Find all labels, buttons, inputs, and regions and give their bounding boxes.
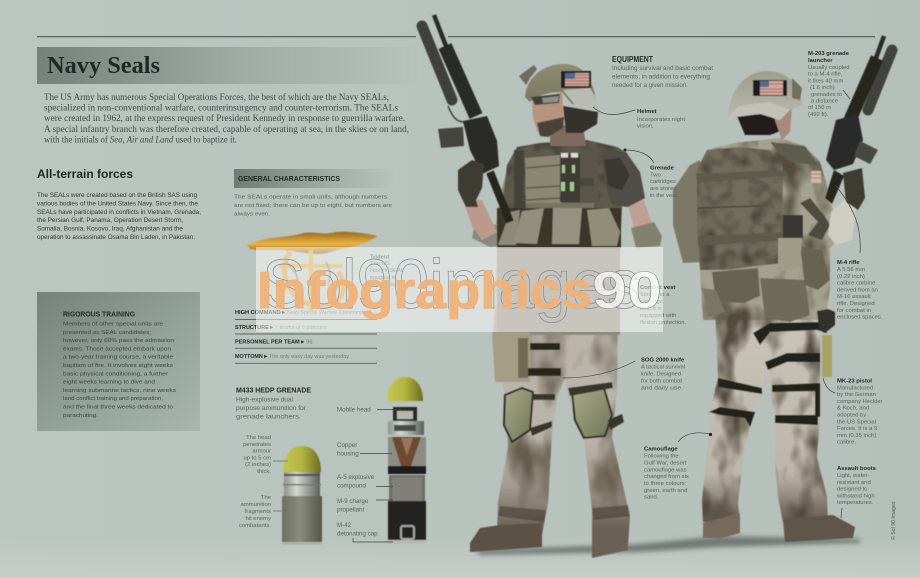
equipment text xyxy=(612,55,713,89)
trident label: Navy's SEAL xyxy=(370,268,405,274)
panel: rigorous training: land conflict training and preparation, xyxy=(63,396,163,402)
equipment text: needed for a given mission. xyxy=(612,82,688,89)
callout: MK-23 pistol: Forces. It is a 9 xyxy=(837,426,877,432)
section: all-terrain forces: operation to assassinate Osama Bin Laden, in Pakistan. xyxy=(37,234,195,241)
callout: M-4 rifle: M-4 rifle xyxy=(837,260,860,266)
grenade cross-section labels xyxy=(337,406,401,542)
grenade exterior labels: The xyxy=(261,495,272,501)
grenade cross-section labels: propellant xyxy=(337,507,364,514)
grenade exterior labels: (2 inches) xyxy=(245,462,271,468)
callout: SOG 2000 knife: A tactical survival xyxy=(641,365,685,371)
panel: rigorous training: eight weeks learning to dive and xyxy=(63,380,155,386)
characteristics table xyxy=(235,310,377,363)
grenade heading: M433 HEDP GRENADE xyxy=(236,388,311,395)
section: all-terrain forces: All-terrain forces xyxy=(37,167,133,181)
callout: M-203 grenade launcher: M-203 grenade xyxy=(808,51,850,57)
callout: M-203 grenade launcher: (1.6 inch) xyxy=(810,85,835,91)
grenade cross-section labels: Mobile head xyxy=(337,406,371,414)
grenade cross-section labels: M-9 charge xyxy=(337,498,369,505)
callout: grenade xyxy=(624,148,679,199)
callout: M-203 grenade launcher: (492 ft). xyxy=(808,112,829,118)
rifle, rear soldier xyxy=(825,36,892,210)
callout: camouflage: Camouflage xyxy=(644,446,678,452)
callout: SOG 2000 knife: for both combat xyxy=(641,378,682,384)
trident label: the trident xyxy=(370,282,397,288)
callout: M-203 grenade launcher: grenades to xyxy=(811,92,843,98)
intro text: A special infantry branch was therefore created, capable of operating at sea, in the skies or on land, xyxy=(44,124,409,135)
callout: M-203 grenade launcher: a distance xyxy=(811,98,839,104)
callout: MK-23 pistol: adopted by xyxy=(837,412,866,418)
callout: combat vest: cartridge xyxy=(640,299,664,305)
row: structure: STRUCTURE ▸ xyxy=(235,325,274,331)
trident label: Trident xyxy=(370,254,389,260)
callout: grenade: are stored xyxy=(650,186,677,192)
callout: assault boots: temperatures. xyxy=(837,500,874,506)
pistol holster xyxy=(817,309,835,377)
grenade exterior labels: up to 5 cm xyxy=(243,455,271,461)
grenade exterior labels: fragments xyxy=(245,509,271,515)
intro text: were created in 1962, at the express request of President Kennedy in response to guerrilla warfare. xyxy=(44,113,405,124)
callout: M-203 grenade launcher: to a M-4 rifle, xyxy=(808,72,843,78)
callout: camouflage: to three colours: xyxy=(644,481,687,487)
panel: rigorous training: however, only 60% pass the admission xyxy=(63,338,174,344)
panel: rigorous training: Members of other special units are xyxy=(63,322,164,328)
grenade heading: High-explosive dual xyxy=(236,397,293,404)
section: all-terrain forces: The SEALs were created based on the British SAS using xyxy=(37,192,197,199)
callout: M-4 rifle xyxy=(835,185,883,321)
callout: MK-23 pistol: by the German xyxy=(837,392,876,398)
grenade exterior labels: hit enemy xyxy=(245,516,271,522)
callout: camouflage: Following the xyxy=(644,454,679,460)
boots, front soldier xyxy=(470,505,630,558)
forearm, front soldier left xyxy=(463,200,497,240)
grenade cross-section labels: Copper xyxy=(337,442,357,449)
panel: rigorous training: presented as SEAL candidates; xyxy=(63,330,151,336)
boots, rear soldier xyxy=(703,513,855,542)
callout: M-4 rifle: calibre carbine xyxy=(837,281,876,287)
section: all-terrain forces: Somalia, Bosnia, Kosovo, Iraq, Afghanistan and the xyxy=(37,226,184,232)
panel: rigorous training xyxy=(37,292,200,431)
callout: MK-23 pistol: mm (0.35 inch) xyxy=(837,433,876,439)
row: motto: The only easy day was yesterday xyxy=(269,354,349,360)
equipment text: EQUIPMENT xyxy=(612,55,653,64)
watermark: Infographics xyxy=(257,262,592,320)
callout: helmet: Incorporates night xyxy=(637,117,685,123)
panel: rigorous training: learning submarine tactics, nine weeks xyxy=(63,388,176,394)
grenade heading xyxy=(236,388,311,420)
ammo pouches xyxy=(497,208,621,248)
callout: helmet: vision. xyxy=(637,124,654,130)
leg straps xyxy=(709,322,827,427)
grenade cross-section labels: detonating cap xyxy=(337,531,378,538)
panel: rigorous training: parachuting. xyxy=(63,413,98,419)
callout: MK-23 pistol: calibre. xyxy=(837,440,856,446)
callout: M-203 grenade launcher: launcher xyxy=(808,58,833,64)
backpack straps xyxy=(696,170,785,246)
waist pouch xyxy=(492,332,561,382)
trident label: insignia is xyxy=(370,275,396,281)
soldier, front view xyxy=(422,15,662,558)
grenades in vest xyxy=(561,153,578,191)
callout: SOG 2000 knife: and daily use. xyxy=(641,385,683,391)
callout: assault boots: Light, water- xyxy=(837,473,869,479)
row: personnel per team: 96 xyxy=(306,339,313,345)
title xyxy=(37,47,422,84)
panel: general characteristics: GENERAL CHARACTERISTICS xyxy=(238,174,340,183)
callout: M-4 rifle: A 5.56 mm xyxy=(837,267,865,273)
callout: M-203 grenade launcher: it fires 40 mm xyxy=(808,78,843,84)
callout: M-203 grenade launcher: Usually coupled xyxy=(808,65,850,71)
trident emblem xyxy=(247,232,378,312)
grenade exterior labels: armour xyxy=(252,449,271,455)
section: all-terrain forces: SEALs have participated in conflicts in Vietnam, Grenada, xyxy=(37,209,201,216)
callout: M-203 grenade launcher: of 150 m xyxy=(808,105,831,111)
callout: combat vest: flexion protection. xyxy=(640,320,687,326)
shoulder flag patch xyxy=(811,171,821,183)
panel: rigorous training: RIGOROUS TRAINING xyxy=(63,312,136,318)
lower shirt xyxy=(497,245,620,335)
legs, rear soldier xyxy=(702,310,830,522)
watermark: 90 xyxy=(592,262,662,320)
helmet, rear soldier xyxy=(728,71,802,120)
grenade cross-section labels: housing xyxy=(337,451,359,458)
equipment text: Including survival and basic combat xyxy=(612,65,713,72)
top rule xyxy=(37,36,875,38)
callout: helmet xyxy=(593,107,685,130)
grenade heading: purpose ammunition for xyxy=(236,405,306,412)
callout: camouflage xyxy=(644,433,712,501)
magazine pouch xyxy=(778,215,803,272)
vest plate xyxy=(514,150,598,210)
callout: combat vest: Combat vest xyxy=(640,285,675,291)
callout: MK-23 pistol: MK-23 pistol xyxy=(837,378,872,384)
callout: combat vest: Similar to a xyxy=(640,292,670,298)
rear sleeve, front soldier xyxy=(472,160,520,247)
callout: MK-23 pistol: Manufactured xyxy=(837,385,873,391)
row: structure: 7 teams of 6 platoons xyxy=(275,325,327,331)
row: motto: MOTTOMN ▸ xyxy=(235,354,268,360)
callout: combat vest: belt, it is xyxy=(640,306,662,312)
callout: camouflage: Gulf War, desert xyxy=(644,460,687,466)
section: all-terrain forces xyxy=(37,167,201,241)
row: high command: HIGH COMMAND ▸ xyxy=(235,310,286,316)
floor shadows xyxy=(475,536,860,555)
callout: M-4 rifle: derived from an xyxy=(837,287,878,293)
callout: M-4 rifle: for combat in xyxy=(837,308,871,314)
trident label xyxy=(370,254,405,288)
callout: grenade: cartridges xyxy=(650,179,676,185)
callout: combat vest xyxy=(640,285,687,326)
callout: assault boots: withstand high xyxy=(836,493,875,499)
forearm, rear soldier xyxy=(828,196,856,245)
section: all-terrain forces: various bodies of the United States Navy. Since then, the xyxy=(37,200,199,207)
lower pouches xyxy=(702,246,830,322)
equipment text: elements, in addition to everything xyxy=(612,73,711,80)
callout: SOG 2000 knife xyxy=(563,358,685,391)
panel: rigorous training: and the final three weeks dedicated to xyxy=(63,404,174,410)
intro text: with the initials of Sea, Air and Land used to baptize it. xyxy=(44,134,237,145)
grenade exterior labels: combatants. xyxy=(239,523,271,529)
trident label: The US xyxy=(370,261,390,267)
grenade cross-section labels: A-5 explosive xyxy=(337,474,375,481)
grenade exterior labels xyxy=(239,435,288,529)
row: high command xyxy=(235,310,377,320)
callout: M-4 rifle: rifle. Designed xyxy=(837,301,875,307)
trousers xyxy=(493,248,630,545)
panel: rigorous training: basic physical conditioning, a further xyxy=(63,371,168,377)
helmet, front soldier xyxy=(519,64,597,110)
torso xyxy=(498,140,627,334)
panel: general characteristics xyxy=(234,169,394,218)
grenade exterior labels: thick. xyxy=(257,469,271,475)
panel: general characteristics: are not fixed; there can be up to eight, but numbers are xyxy=(234,203,393,209)
callout: MK-23 pistol: company Heckler xyxy=(837,399,883,405)
intro text: specialized in non-conventional warfare, counterinsurgency and counter-terrorism. The SEALs xyxy=(44,103,398,114)
callout: grenade: Two xyxy=(650,172,662,178)
neck and head xyxy=(532,92,598,146)
callout: MK-23 pistol xyxy=(823,378,883,446)
callout: assault boots: resistant and xyxy=(837,480,871,486)
panel: general characteristics: always even. xyxy=(234,212,270,218)
callout: M-4 rifle: enclosed spaces. xyxy=(837,315,883,321)
row: personnel per team: PERSONNEL PER TEAM ▸ xyxy=(235,339,305,345)
callout: grenade: Grenade xyxy=(650,165,675,171)
rifle, front soldier xyxy=(422,15,510,222)
callout: camouflage: green, earth and xyxy=(644,488,687,494)
panel: rigorous training: baptism of fire. It involves eight weeks xyxy=(63,363,173,369)
callout: M-4 rifle: M-16 assault xyxy=(837,294,871,300)
near arm, rear soldier xyxy=(673,160,706,263)
grenade exterior labels: ammunition xyxy=(241,502,271,508)
callout: M-203 grenade launcher xyxy=(808,51,850,118)
row: high command: Navy Special Warfare Command xyxy=(287,310,363,316)
soldier, rear view xyxy=(673,36,892,542)
callout: assault boots xyxy=(836,466,877,518)
callout: assault boots: designed to xyxy=(837,487,868,493)
callout: helmet: Helmet xyxy=(637,109,657,115)
callout: camouflage: camouflage was xyxy=(644,467,687,473)
dark sleeve stripe xyxy=(770,142,830,240)
row: personnel per team xyxy=(235,339,377,348)
panel: rigorous training: exams. Those accepted embark upon xyxy=(63,346,171,352)
callout: assault boots: Assault boots xyxy=(837,466,877,472)
grenade exterior labels: The head xyxy=(246,435,271,441)
grenade cross-section labels: compound xyxy=(337,483,366,490)
backpack xyxy=(697,147,783,270)
callout: MK-23 pistol: the US Special xyxy=(837,419,876,425)
intro text xyxy=(44,92,409,145)
callout: SOG 2000 knife: knife. Designed xyxy=(641,372,681,378)
grenade cross-section xyxy=(386,377,426,544)
row: structure xyxy=(235,325,377,334)
callout: camouflage: sand. xyxy=(644,495,659,501)
section: all-terrain forces: the Persian Gulf, Panama, Operation Desert Storm, xyxy=(37,217,183,224)
callout: MK-23 pistol: & Koch, and xyxy=(837,406,869,412)
callout: camouflage: changed from six xyxy=(644,474,689,480)
sleeve and forearm, front soldier right xyxy=(602,150,662,248)
image credit: © Sol 90 Images xyxy=(890,501,897,540)
head, rear soldier xyxy=(737,108,792,140)
callout: SOG 2000 knife: SOG 2000 knife xyxy=(641,358,685,364)
row: motto xyxy=(235,354,377,363)
panel: general characteristics: The SEALs operate in small units, although numbers xyxy=(234,194,387,200)
callout: combat vest: equipped with xyxy=(640,313,676,319)
grenade exterior xyxy=(282,446,322,545)
callout: grenade: in the vest. xyxy=(650,193,679,199)
callout: M-4 rifle: (0.22 inch) xyxy=(837,274,865,280)
watermark: Sol90images xyxy=(262,245,640,323)
grenade exterior labels: penetrates xyxy=(243,442,271,448)
grenade cross-section labels: M-42 xyxy=(337,522,352,529)
grenade heading: grenade launchers. xyxy=(236,413,301,420)
panel: rigorous training: a two-year training course, a veritable xyxy=(63,355,174,361)
torso and sleeve, rear soldier xyxy=(697,138,838,320)
title: Navy Seals xyxy=(47,53,160,79)
knee pads xyxy=(504,382,624,442)
intro text: The US Army has numerous Special Operations Forces, the best of which are the Navy SEALs, xyxy=(44,92,389,103)
